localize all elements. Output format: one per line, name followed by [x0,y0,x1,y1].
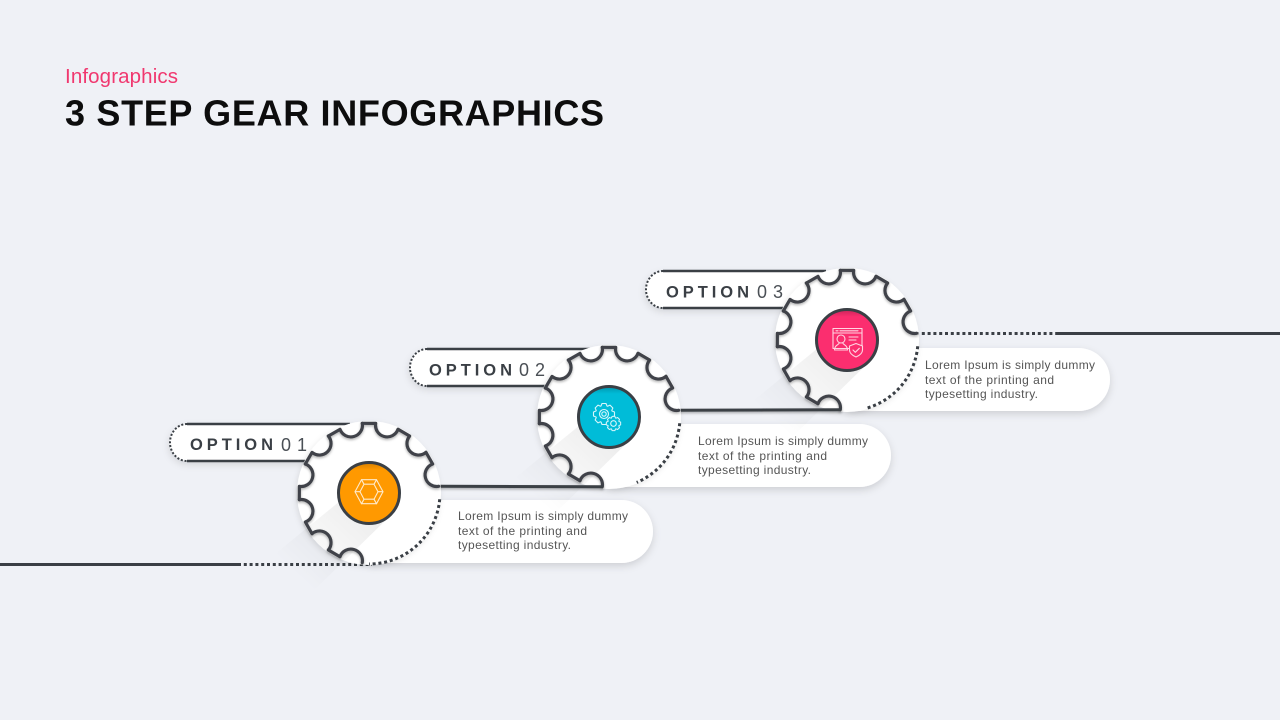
option 03 label: 03 [757,282,783,302]
gear 3 [747,267,919,444]
option 03 label: OPTION [666,284,749,302]
connector line gear 1 to gear 2 [438,485,603,488]
step 3 description pill: Lorem Ipsum is simply dummy [925,358,1095,372]
step 1 description pill: text of the printing and [458,524,587,538]
step 3 description pill: text of the printing and [925,373,1054,387]
gear 1 [269,420,441,597]
option 01 label [170,424,350,461]
option 03 label [646,271,826,308]
step 2 description pill: Lorem Ipsum is simply dummy [698,434,868,448]
step 1 description pill: typesetting industry. [458,538,571,552]
icon: hexagon [355,480,383,504]
step 1 description pill: Lorem Ipsum is simply dummy [458,509,628,523]
option 02 label [410,349,590,386]
icon: two cogs [594,404,621,431]
subtitle: Infographics [65,65,178,88]
option 02 label: OPTION [429,362,512,380]
step 2 description pill [609,424,891,487]
icon: browser window with user and shield [833,328,862,357]
option 02 label: 02 [519,360,545,380]
option 01 label: OPTION [190,436,273,454]
step 1 description pill [369,500,653,563]
right end line [916,332,1280,335]
step 2 description pill: typesetting industry. [698,463,811,477]
option 01 label: 01 [281,435,307,455]
title: 3 STEP GEAR INFOGRAPHICS [65,92,604,134]
gear 2 [509,344,681,521]
connector line gear 2 to gear 3 [678,408,841,412]
step 3 description pill [847,348,1110,411]
step 2 description pill: text of the printing and [698,449,827,463]
step 3 description pill: typesetting industry. [925,387,1038,401]
left base line [0,563,372,566]
